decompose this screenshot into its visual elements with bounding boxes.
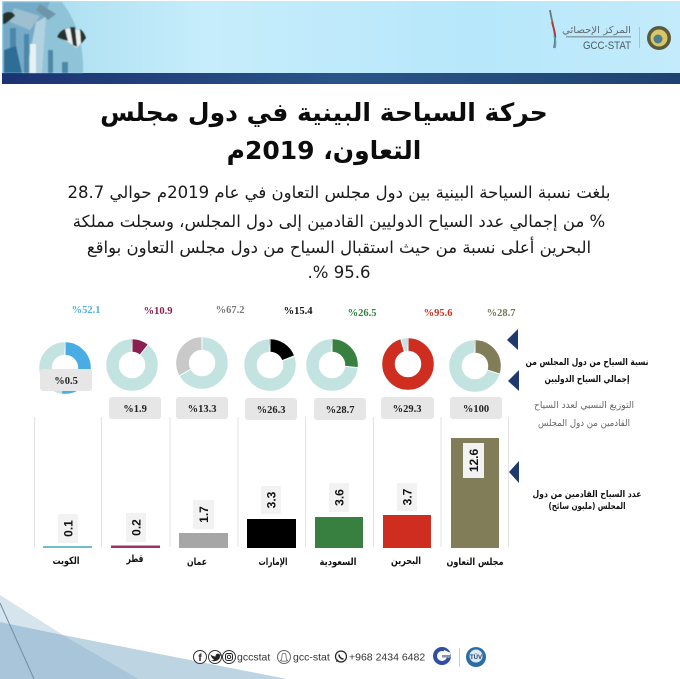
legend: tourist share: نسبة السياح من دول المجلس من [526, 357, 648, 368]
tourist share percentages: %52.1 [72, 305, 100, 316]
icon: TUV certification badge: TÜV [470, 654, 482, 661]
country labels: الكويت [52, 556, 80, 567]
donut: UAE [250, 338, 296, 384]
GCC-STAT logo: GCC-STAT [583, 40, 631, 52]
country labels: السعودية [320, 557, 356, 568]
icon: facebook [194, 650, 206, 664]
tourist share percentages: %26.5 [348, 308, 376, 319]
relative distribution boxes: %13.3 [188, 404, 216, 415]
icon: TUV certification badge [466, 647, 486, 667]
legend: distribution [534, 400, 634, 429]
footer contacts: gccstat [237, 652, 270, 664]
bar values: 1.7 [197, 506, 211, 523]
country labels: مجلس التعاون [446, 557, 504, 568]
icon: whatsapp [336, 651, 346, 662]
footer contacts: gcc-stat [293, 652, 330, 664]
text: حركة السياحة البينية في دول مجلس [100, 98, 548, 127]
GCC-STAT logo [550, 10, 671, 52]
donut: Qatar [112, 338, 152, 384]
bar values: 12.6 [467, 448, 481, 472]
tourist share percentages: %15.4 [284, 306, 313, 317]
bar values: 3.6 [332, 489, 346, 506]
title [100, 98, 548, 166]
tourist share percentages: %28.7 [487, 308, 515, 319]
donut row [46, 336, 501, 388]
icon: instagram [222, 650, 236, 664]
header collage: globe, buildings and parachutes [3, 2, 86, 73]
legend: tourist share [526, 357, 648, 385]
bar chart [43, 438, 499, 548]
relative distribution boxes: %0.5 [54, 376, 78, 387]
donut: Saudi Arabia [312, 338, 359, 384]
footer contacts [194, 650, 425, 664]
icon: snapchat [278, 650, 290, 664]
icon: twitter [208, 650, 222, 664]
footer corner shapes [0, 595, 287, 679]
bar values: 0.2 [130, 519, 144, 536]
country labels: عمان [187, 557, 207, 568]
relative distribution boxes: %1.9 [123, 404, 147, 415]
icon: GCC certification logo [435, 649, 451, 663]
country labels: الإمارات [258, 557, 288, 568]
country labels: قطر [126, 554, 144, 565]
relative distribution boxes [40, 369, 502, 420]
text: بلغت نسبة السياحة البينية بين دول مجلس التعاون في عام 2019م حوالي 28.7 [68, 183, 610, 202]
icon: facebook: f [198, 653, 202, 664]
legend: distribution: القادمين من دول المجلس [538, 418, 630, 429]
relative distribution boxes: %26.3 [257, 405, 285, 416]
tourist share percentages: %10.9 [144, 306, 172, 317]
bar values: 3.7 [400, 488, 414, 505]
tourist share percentages: %67.2 [216, 305, 244, 316]
donut: Bahrain [388, 337, 428, 384]
donut: Oman [178, 336, 222, 382]
country labels [52, 554, 504, 568]
GCC-STAT logo: المركز الإحصائي [562, 25, 631, 36]
donut: Kuwait [46, 341, 84, 388]
legend: bar values: عدد السياح القادمين من دول [532, 490, 642, 500]
header banner [2, 1, 680, 84]
text: البحرين أعلى نسبة من حيث استقبال السياح من دول مجلس التعاون بواقع [87, 238, 591, 257]
text: التعاون، 2019م [227, 136, 421, 165]
text: % من إجمالي عدد السياح الدوليين القادمين إلى دول المجلس، وسجلت مملكة [73, 212, 605, 231]
tourist share percentages [72, 305, 515, 319]
relative distribution boxes: %28.7 [326, 405, 354, 416]
relative distribution boxes: %100 [463, 404, 489, 415]
arrow: tourist share [507, 329, 518, 350]
arrow: distribution [508, 370, 519, 391]
bar values: 0.1 [62, 520, 76, 537]
country labels: البحرين [391, 556, 421, 567]
tourist share percentages: %95.6 [424, 308, 452, 319]
legend: bar values: المجلس (مليون سائح) [548, 502, 626, 512]
donut: GCC [456, 339, 501, 386]
legend: distribution: التوزيع النسبي لعدد السياح [534, 400, 634, 411]
relative distribution boxes: %29.3 [393, 404, 421, 415]
text: 95.6 %. [308, 263, 370, 282]
bar values: 3.3 [264, 491, 278, 508]
bar values [58, 443, 484, 543]
legend: bar values [532, 490, 642, 512]
intro paragraph [68, 183, 610, 282]
legend: tourist share: إجمالي السياح الدوليين [544, 374, 630, 385]
arrow: bar values [509, 461, 519, 483]
footer contacts: +968 2434 6482 [349, 652, 425, 664]
